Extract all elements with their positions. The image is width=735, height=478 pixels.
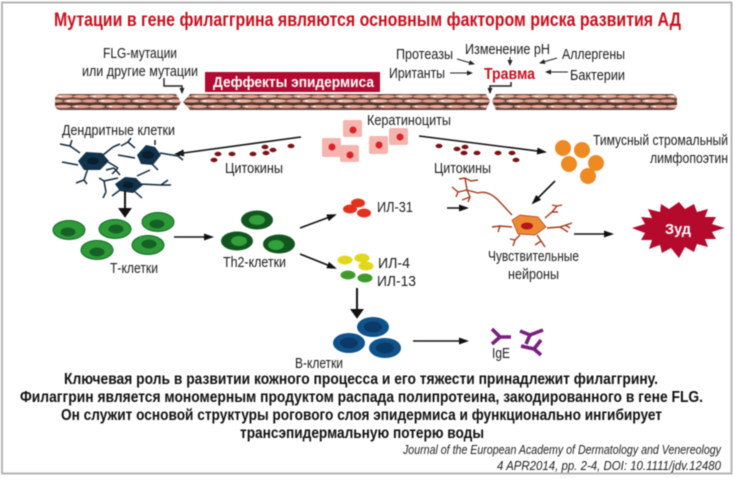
label: sensory neurons — [488, 249, 579, 283]
label: B cells: В-клетки — [295, 356, 343, 372]
sensory neuron — [452, 178, 579, 283]
IL-31 — [343, 198, 413, 218]
summary text: трансэпидермальную потерю воды — [240, 425, 484, 442]
citation — [402, 442, 722, 473]
TSLP — [555, 133, 728, 184]
arrow: B cells to IgE — [413, 340, 467, 342]
label: IL-4: ИЛ-4 — [378, 256, 410, 272]
label: T cells: Т-клетки — [110, 261, 158, 277]
summary text: Ключевая роль в развитии кожного процесса и его тяжести принадлежит филаггрину. — [64, 371, 658, 388]
arrow: Th2 to IL-31 — [300, 215, 335, 228]
arrow: IL-4 and IL-13 to B cells — [352, 288, 362, 317]
label: sensory neurons: нейроны — [508, 267, 559, 283]
T cells — [53, 212, 174, 277]
trauma factors — [389, 42, 625, 84]
Th2 cells — [221, 210, 295, 271]
label: FLG mutations: FLG-мутации — [103, 46, 177, 62]
neuron nucleus — [521, 222, 533, 230]
keratinocyte cells — [322, 120, 408, 162]
keratinocytes — [322, 113, 451, 162]
label: keratinocytes: Кератиноциты — [367, 113, 451, 129]
label: allergens: Аллергены — [562, 47, 625, 63]
IgE — [492, 329, 543, 362]
arrow: neuron to itch — [574, 233, 612, 235]
label: pH change: Изменение pH — [465, 42, 550, 58]
dendritic cells — [60, 123, 184, 198]
label: bacteria: Бактерии — [570, 68, 625, 84]
arrow: trauma to epidermis — [490, 82, 511, 93]
label: sensory neurons: Чувствительные — [488, 249, 579, 265]
neuron processes — [452, 178, 572, 247]
neuron body — [512, 215, 546, 235]
label: FLG mutations — [82, 46, 198, 80]
B cells — [295, 317, 401, 372]
arrow: FLG mutations to epidermis — [164, 78, 182, 93]
banner: epidermal defects: Деффекты эпидермиса — [213, 74, 375, 91]
arrow: keratinocytes to dendritic cells — [176, 137, 301, 154]
cytokines left — [210, 144, 294, 177]
label: IL-13: ИЛ-13 — [377, 274, 416, 290]
arrow: dendritic cells to T cells — [120, 191, 130, 216]
IL-4 and IL-13 — [338, 254, 416, 290]
arrow: IL-31 to neuron — [447, 207, 467, 209]
summary text: Он служит основой структуры рогового слоя эпидермиса и функционально ингибирует — [61, 407, 662, 424]
arrow: keratinocytes to TSLP — [419, 136, 545, 152]
IL-31: ИЛ-31 — [377, 200, 413, 216]
label: itch: Зуд — [665, 221, 691, 238]
label: dendritic cells: Дендритные клетки — [62, 123, 175, 139]
itch starburst — [632, 202, 725, 258]
label: FLG mutations: или другие мутации — [82, 64, 198, 80]
arrow: T cells to Th2 cells — [174, 236, 212, 238]
cytokines right — [434, 144, 520, 177]
label: trauma: Травма — [484, 66, 535, 83]
arrow: TSLP to neuron — [533, 181, 555, 203]
arrows into trauma — [450, 57, 568, 73]
label: proteases: Протеазы — [396, 47, 453, 63]
dendritic cell bodies — [60, 138, 184, 198]
label: Th2 cells: Th2-клетки — [223, 255, 286, 271]
summary text — [20, 371, 703, 442]
arrow: Th2 to IL-4 and IL-13 — [300, 254, 335, 268]
label: IgE: IgE — [492, 346, 510, 362]
epidermis band — [55, 94, 677, 110]
cytokines left: Цитокины — [225, 161, 283, 177]
cytokines right: Цитокины — [434, 161, 491, 177]
label: irritants: Иританты — [389, 66, 445, 82]
